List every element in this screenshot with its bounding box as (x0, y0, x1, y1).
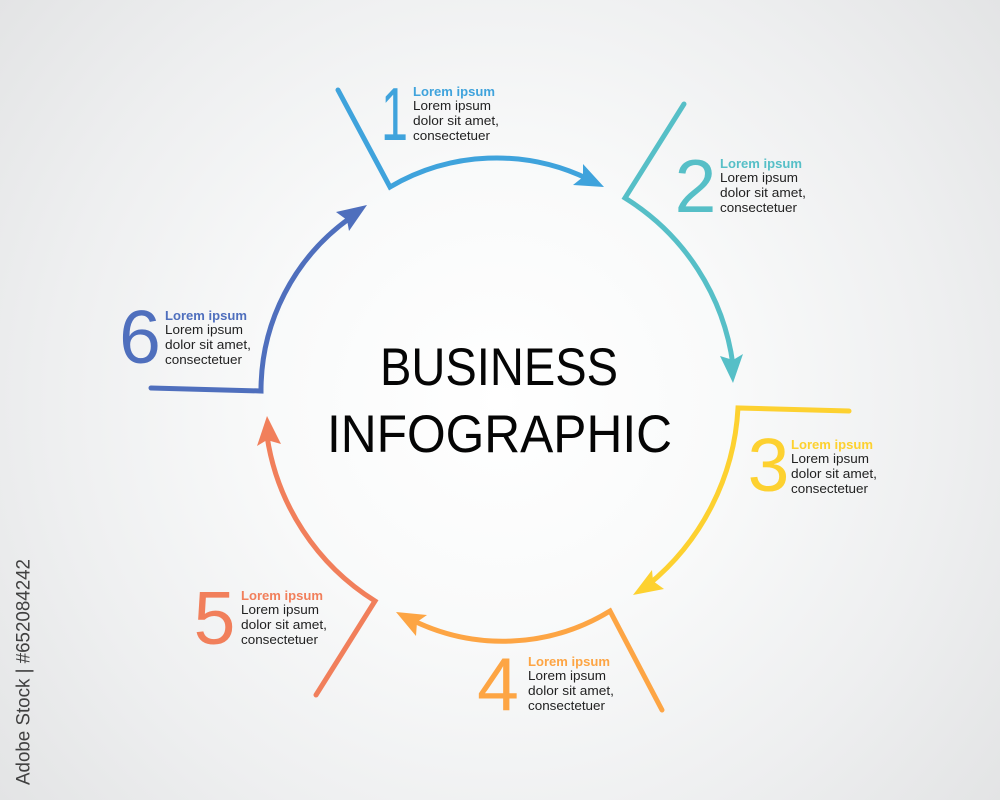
arrow 4 (396, 611, 662, 710)
arrow 5 (257, 416, 375, 695)
step 6 (119, 205, 367, 391)
text block 5: consectetuer (241, 632, 319, 647)
text block 2 (720, 156, 806, 215)
number 3: 3 (748, 423, 789, 507)
text block 4: dolor sit amet, (528, 683, 614, 698)
number 2: 2 (675, 144, 716, 228)
arrow 2 (625, 104, 743, 383)
text block 3: Lorem ipsum (791, 451, 869, 466)
step 5 (194, 416, 375, 695)
arrow 3 (633, 408, 849, 595)
text block 3 (791, 437, 877, 496)
number 5: 5 (194, 576, 235, 660)
number 1: 1 (381, 72, 408, 156)
text block 2: Lorem ipsum (720, 170, 798, 185)
title (327, 338, 672, 464)
text block 4: consectetuer (528, 698, 606, 713)
text block 1 (413, 84, 499, 143)
text block 2: dolor sit amet, (720, 185, 806, 200)
number 4: 4 (477, 642, 519, 726)
step 3 (633, 408, 877, 595)
text block 4: Lorem ipsum (528, 668, 606, 683)
text block 3: dolor sit amet, (791, 466, 877, 481)
text block 1: Lorem ipsum (413, 84, 495, 99)
text block 3: consectetuer (791, 481, 869, 496)
arrow 1 (338, 90, 604, 187)
text block 6: Lorem ipsum (165, 322, 243, 337)
text block 3: Lorem ipsum (791, 437, 873, 452)
number 6: 6 (119, 295, 161, 379)
text block 6: consectetuer (165, 352, 243, 367)
text block 1: Lorem ipsum (413, 98, 491, 113)
text block 5: dolor sit amet, (241, 617, 327, 632)
step 4 (396, 611, 662, 726)
side credit text: Adobe Stock | #652084242 (14, 559, 34, 785)
text block 6: Lorem ipsum (165, 308, 247, 323)
text block 2: consectetuer (720, 200, 798, 215)
text block 5: Lorem ipsum (241, 588, 323, 603)
text block 6: dolor sit amet, (165, 337, 251, 352)
step 1 (338, 72, 604, 187)
text block 5 (241, 588, 327, 647)
text block 2: Lorem ipsum (720, 156, 802, 171)
text block 6 (165, 308, 251, 367)
text block 5: Lorem ipsum (241, 602, 319, 617)
step 2 (625, 104, 806, 383)
title: INFOGRAPHIC (327, 405, 672, 464)
text block 4 (528, 654, 614, 713)
title: BUSINESS (380, 338, 618, 397)
text block 1: consectetuer (413, 128, 491, 143)
arrow 6 (151, 205, 367, 391)
text block 4: Lorem ipsum (528, 654, 610, 669)
text block 1: dolor sit amet, (413, 113, 499, 128)
